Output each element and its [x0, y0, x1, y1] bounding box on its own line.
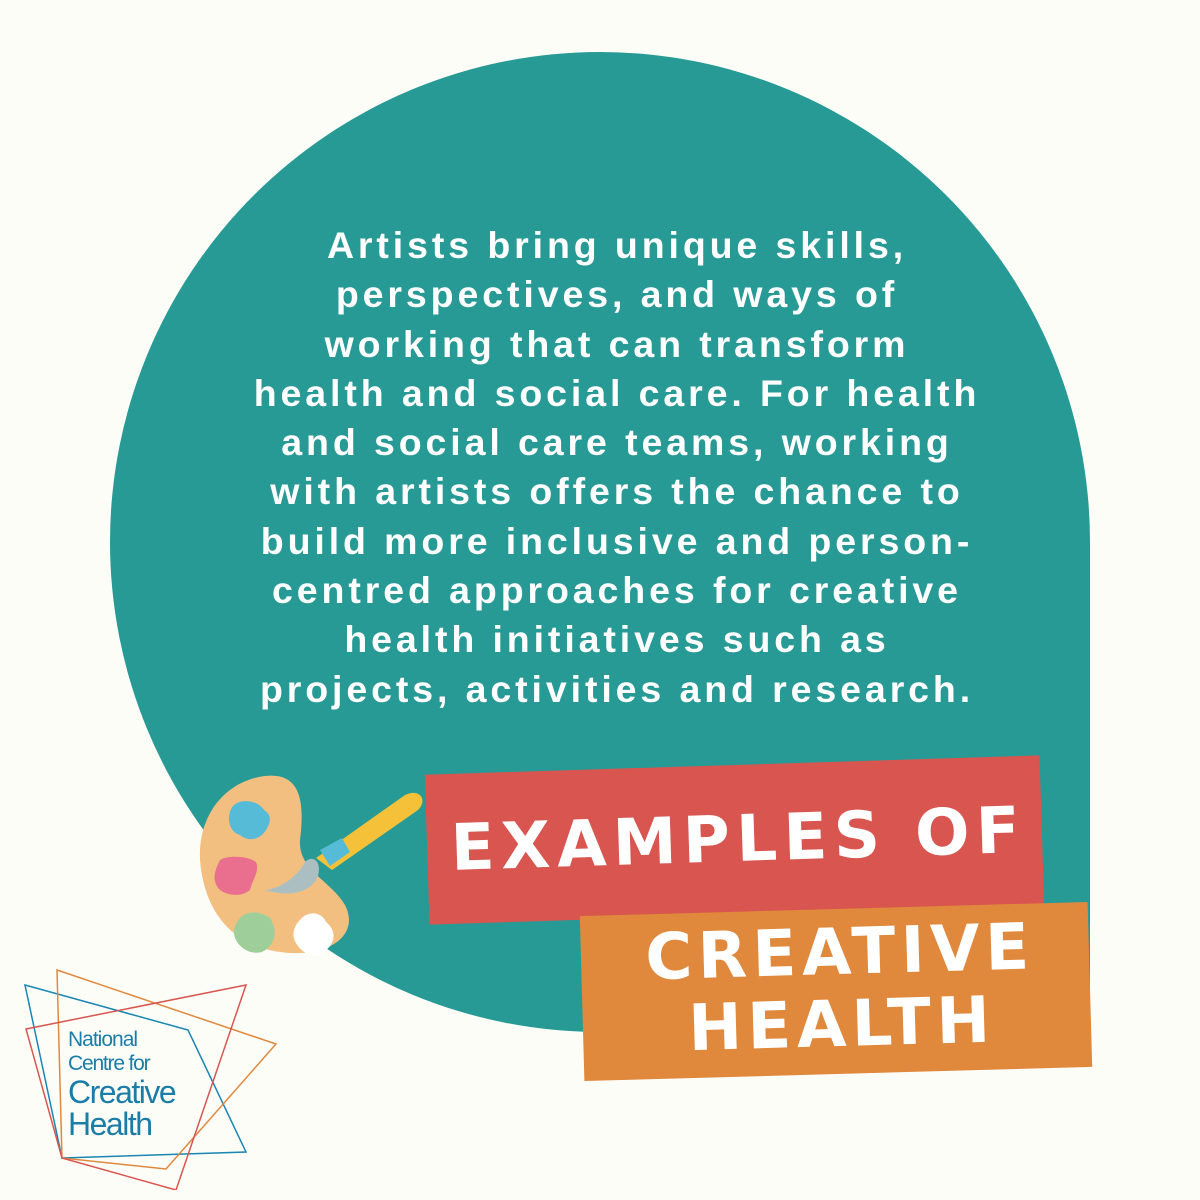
- body text: perspectives, and ways of: [336, 273, 898, 315]
- body text: build more inclusive and person-: [261, 520, 973, 562]
- body text: [254, 224, 980, 710]
- body text: health and social care. For health: [254, 372, 980, 414]
- banner: examples of: [425, 755, 1044, 925]
- body text: projects, activities and research.: [260, 668, 974, 710]
- banner: creative health: HEALTH: [687, 984, 997, 1066]
- body text: and social care teams, working: [281, 421, 953, 463]
- body text: Artists bring unique skills,: [327, 224, 907, 266]
- logo text: [68, 1028, 176, 1142]
- body text: with artists offers the chance to: [270, 470, 964, 512]
- logo text: Centre for: [68, 1052, 149, 1075]
- body text: working that can transform: [325, 323, 909, 365]
- banner: creative health: CREATIVE: [644, 910, 1036, 995]
- icon: paint palette with brush: [200, 776, 422, 954]
- body text: centred approaches for creative: [272, 569, 962, 611]
- banner: creative health: [580, 902, 1092, 1081]
- teal blob panel: [110, 52, 1090, 1032]
- logo text: Health: [68, 1106, 152, 1142]
- logo: National Centre for Creative Health: [24, 969, 278, 1190]
- logo text: National: [68, 1028, 137, 1051]
- banner: examples of: EXAMPLES OF: [450, 794, 1027, 886]
- logo text: Creative: [68, 1074, 175, 1110]
- body text: health initiatives such as: [344, 618, 890, 660]
